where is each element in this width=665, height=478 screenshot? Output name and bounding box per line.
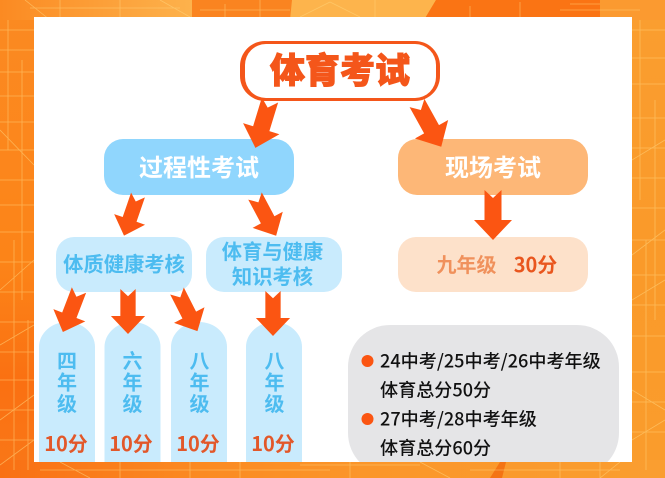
column: 四年级 10分: 年 bbox=[57, 366, 77, 396]
column: 八年级 10分 (知识考核) bbox=[246, 322, 302, 462]
column: 八年级 10分 (知识考核): 10分 bbox=[251, 428, 295, 457]
arrow: 现场考试 to 九年级 bbox=[474, 190, 512, 240]
column: 四年级 10分: 10分 bbox=[44, 428, 88, 457]
arrow: title to 现场考试 bbox=[400, 94, 458, 156]
text: 27中考/28中考年级: 27中考/28中考年级 bbox=[380, 406, 537, 432]
arrow: title to 过程性考试 bbox=[237, 94, 288, 153]
column: 八年级 10分 (知识考核): 八 bbox=[264, 345, 284, 374]
column: 八年级 10分 (知识考核): 级 bbox=[264, 388, 284, 417]
column: 六年级 10分: 六 bbox=[122, 345, 142, 374]
title: 体育考试 bbox=[240, 41, 440, 101]
box: 过程性考试 bbox=[104, 139, 294, 195]
callout: total score notes bbox=[348, 325, 619, 475]
column: 八年级 10分 (知识考核): 年 bbox=[264, 366, 284, 396]
bullet: 27/28 bbox=[362, 413, 374, 425]
column: 八年级 10分 (体质健康): 级 bbox=[190, 388, 210, 417]
box: 体质健康考核: 体质健康考核 bbox=[63, 248, 185, 278]
box: 体育与健康知识考核: 体育与健康 bbox=[222, 235, 323, 265]
column: 四年级 10分: 四 bbox=[57, 345, 77, 374]
column: 八年级 10分 (体质健康): 10分 bbox=[176, 428, 220, 457]
column: 八年级 10分 (体质健康): 年 bbox=[190, 366, 210, 396]
box: 体育与健康知识考核 bbox=[206, 235, 342, 292]
column: 六年级 10分: 级 bbox=[122, 388, 142, 417]
column: 四年级 10分: 级 bbox=[57, 388, 77, 417]
column: 八年级 10分 (体质健康): 八 bbox=[190, 345, 210, 374]
text: 体育总分60分: 体育总分60分 bbox=[380, 434, 491, 460]
bullet: 24/25/26 bbox=[362, 355, 374, 367]
text: 体育总分50分: 体育总分50分 bbox=[380, 376, 491, 402]
arrow: 体质健康考核 to 四年级 bbox=[47, 284, 95, 338]
arrow: 体质健康考核 to 八年级 bbox=[162, 283, 213, 339]
arrow: 过程性考试 to 体质健康考核 bbox=[109, 190, 153, 241]
box: 体质健康考核 bbox=[56, 237, 192, 292]
column: 六年级 10分: 10分 bbox=[109, 428, 153, 457]
box: 九年级 30分: 九年级 bbox=[436, 249, 496, 278]
box: 过程性考试: 过程性考试 bbox=[139, 148, 259, 183]
box: 九年级 30分: 30分 bbox=[514, 249, 557, 278]
arrow: 过程性考试 to 体育与健康知识考核 bbox=[240, 188, 291, 244]
arrow: 体质健康考核 to 六年级 bbox=[111, 289, 145, 334]
column: 六年级 10分 bbox=[104, 322, 160, 462]
arrow: 知识考核 to 八年级 bbox=[256, 291, 290, 336]
box: 现场考试: 现场考试 bbox=[445, 148, 541, 183]
box: 九年级 30分 bbox=[398, 237, 588, 292]
column: 六年级 10分: 年 bbox=[122, 366, 142, 396]
box: 现场考试 bbox=[398, 139, 588, 195]
box: 体育与健康知识考核: 知识考核 bbox=[232, 260, 313, 290]
text: 24中考/25中考/26中考年级: 24中考/25中考/26中考年级 bbox=[380, 348, 601, 374]
column: 八年级 10分 (体质健康) bbox=[171, 322, 227, 462]
title: 体育考试: 体育考试 bbox=[270, 43, 410, 94]
column: 四年级 10分 bbox=[39, 322, 95, 462]
